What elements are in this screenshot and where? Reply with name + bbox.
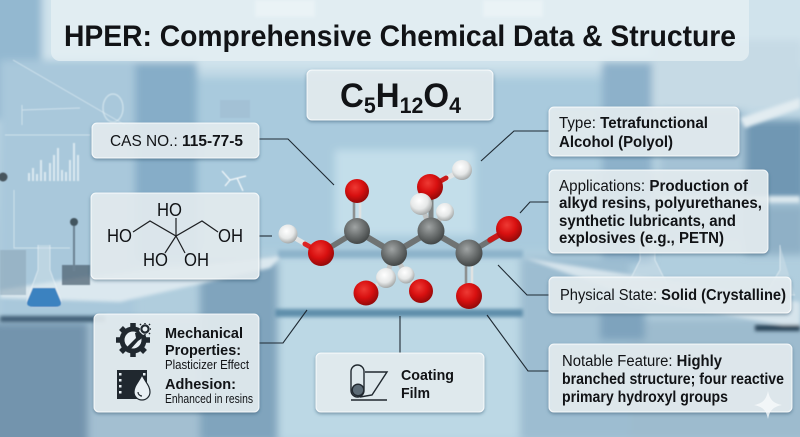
atoms — [278, 160, 522, 309]
panel: type: Alcohol (Polyol) — [559, 134, 673, 151]
icon: film roll — [351, 365, 387, 400]
panel: notable feature: Notable Feature: Highly — [562, 353, 722, 370]
adhesion text: Enhanced in resins — [165, 392, 253, 406]
panel: applications: synthetic lubricants, and — [559, 213, 736, 230]
adhesion text: Adhesion: — [165, 376, 236, 393]
mechanical properties text: Plasticizer Effect — [165, 358, 249, 372]
background: holographic chart and lab props — [0, 60, 795, 307]
panel: notable feature: branched structure; four reactive — [562, 371, 784, 388]
panel: molecular formula: 5 — [364, 93, 376, 118]
molecule: 3D ball-and-stick model — [278, 160, 522, 309]
panel: molecular formula: 4 — [449, 93, 462, 118]
mechanical properties text: Mechanical — [165, 325, 243, 342]
structure labels: HO — [143, 250, 168, 270]
panel: type: Type: Tetrafunctional — [559, 115, 708, 132]
mechanical properties text: Properties: — [165, 342, 241, 359]
panel: applications — [549, 170, 768, 253]
panel: type — [549, 107, 739, 156]
structure labels: HO — [107, 226, 132, 246]
structure bonds — [133, 218, 218, 253]
panel: molecular formula: O — [423, 77, 449, 115]
panel: mechanical properties and adhesion — [94, 314, 259, 412]
panel: molecular formula: H — [376, 77, 400, 115]
panel: molecular formula — [307, 70, 493, 120]
panel: applications: alkyd resins, polyurethanes, — [559, 195, 762, 212]
structure labels: OH — [184, 250, 209, 270]
panel: applications: Applications: Production of — [559, 178, 749, 195]
structure labels: OH — [218, 226, 243, 246]
panel: molecular formula: 12 — [400, 93, 423, 118]
panel: physical state: Physical State: Solid (Crystalline) — [560, 287, 786, 304]
panel: CAS number — [92, 123, 259, 158]
coating film text: Coating — [401, 367, 454, 384]
title panel — [51, 0, 749, 61]
connector lines — [259, 131, 549, 371]
icon: gear with wrench — [116, 323, 151, 357]
panel: notable feature — [549, 344, 792, 412]
panel: notable feature: primary hydroxyl groups — [562, 389, 728, 406]
mechanical properties text — [165, 325, 249, 372]
title text: HPER: Comprehensive Chemical Data & Structure — [64, 20, 736, 53]
icon: sparkle — [754, 391, 782, 419]
panel: physical state — [549, 277, 791, 313]
structure labels: HO — [157, 200, 182, 220]
structure labels — [107, 200, 243, 270]
panel: coating film: Film — [401, 385, 430, 402]
adhesion text — [165, 376, 253, 406]
panel: coating film — [316, 353, 484, 412]
panel: CAS number: CAS NO.: 115-77-5 — [110, 133, 243, 150]
panel: applications: explosives (e.g., PETN) — [559, 230, 724, 247]
panel: skeletal structure — [91, 193, 259, 279]
panel: molecular formula: C — [340, 77, 365, 115]
icon: film with drop — [117, 370, 150, 400]
